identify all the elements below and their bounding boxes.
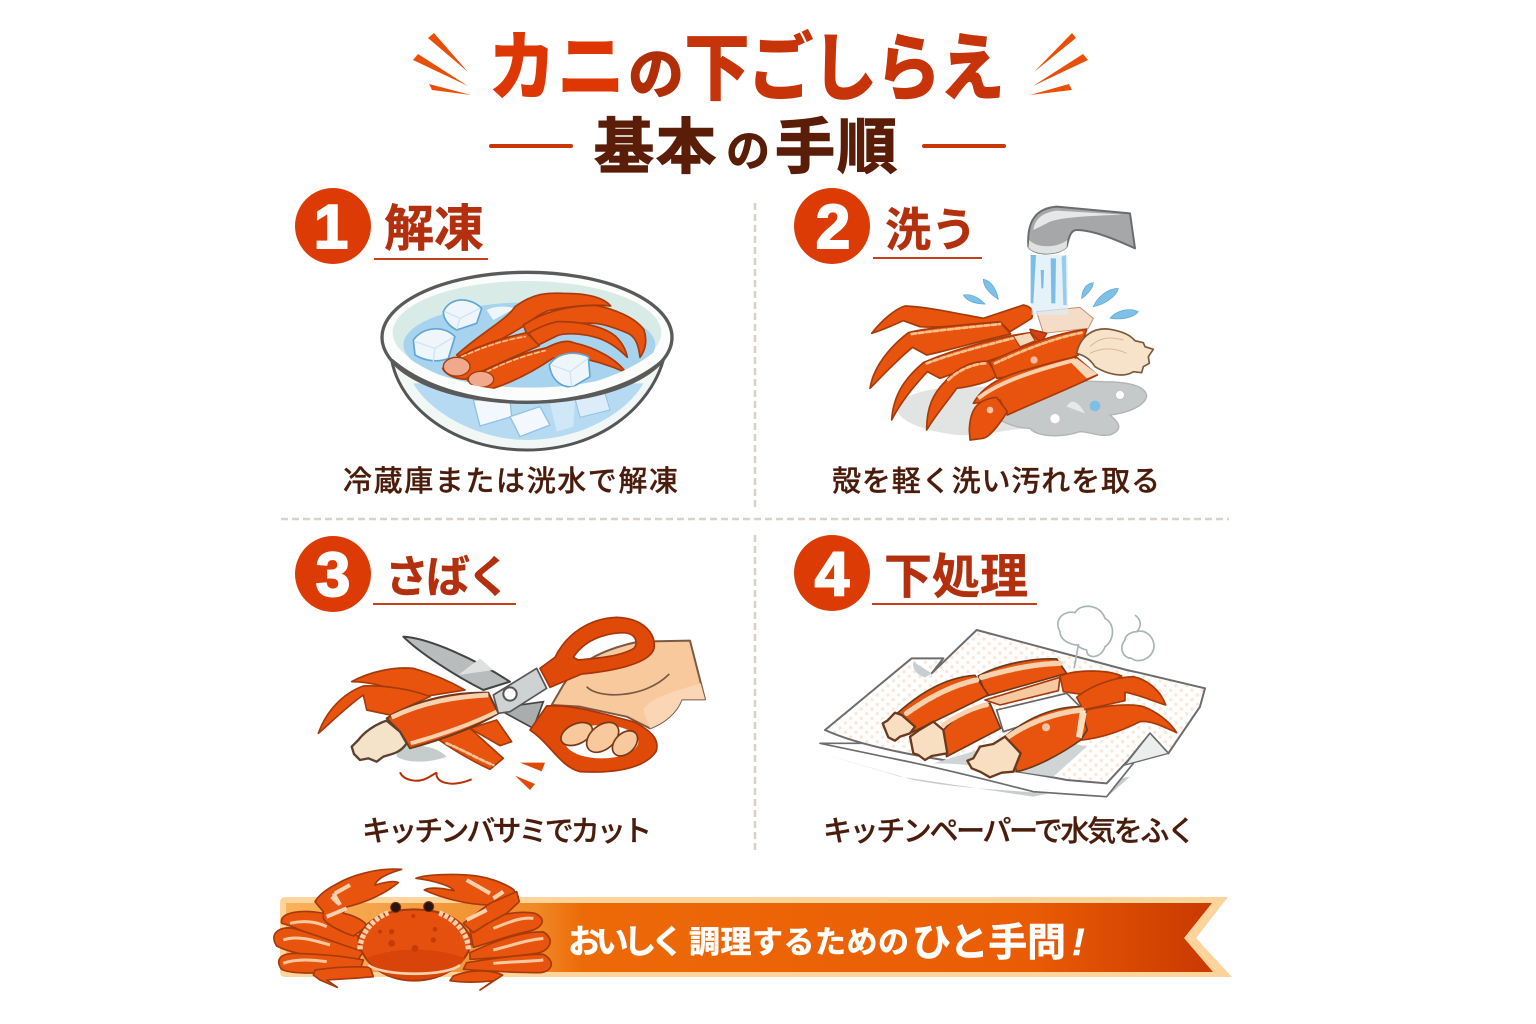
title: main heading: 下ごしらえ bbox=[684, 28, 1005, 110]
banner message: 調理するための bbox=[689, 925, 909, 960]
heading underline 3 bbox=[373, 603, 516, 605]
crab meat end bbox=[1077, 329, 1153, 375]
heading: さばく: さばく bbox=[385, 553, 511, 602]
number badge 1: 1 bbox=[314, 193, 348, 262]
icon: scissors blades bbox=[403, 637, 510, 690]
claws bbox=[315, 869, 519, 936]
heading underline 1 bbox=[374, 258, 488, 260]
dashed vertical and horizontal dividers bbox=[281, 203, 1229, 853]
heading: 洗う: 洗う bbox=[885, 204, 977, 256]
caption step 4: キッチンペーパーで水気をふく bbox=[823, 815, 1196, 848]
subtitle: 手順 bbox=[775, 114, 897, 181]
icon: water splashes bbox=[963, 279, 1138, 319]
number badge 2 bbox=[794, 188, 870, 264]
heading underline 4 bbox=[872, 603, 1037, 605]
subtitle left rule bbox=[489, 144, 573, 148]
illustration: crab legs on kitchen paper bbox=[820, 606, 1205, 797]
banner message bbox=[568, 922, 1085, 965]
title: main heading: の bbox=[628, 43, 684, 106]
heading: 解凍: 解凍 bbox=[384, 201, 484, 257]
heading underline 2 bbox=[873, 257, 982, 259]
icon: right burst lines bbox=[1030, 33, 1088, 95]
icon: hand bbox=[552, 641, 705, 728]
icon: cut marks bbox=[400, 763, 545, 790]
icon: running water bbox=[1031, 255, 1068, 315]
icon: puddle of dirty water bbox=[897, 381, 1147, 436]
crab eyes bbox=[391, 902, 434, 912]
caption step 2: 殻を軽く洗い汚れを取る bbox=[832, 465, 1160, 498]
icon: steam clouds bbox=[1058, 606, 1154, 668]
title: main heading bbox=[488, 26, 1005, 111]
number badge 3: 3 bbox=[316, 541, 350, 610]
back crab meat under water bbox=[1037, 307, 1093, 333]
number badge 1 bbox=[295, 188, 371, 264]
caption step 3: キッチンバサミでカット bbox=[362, 816, 652, 848]
title: main heading: カニ bbox=[488, 26, 625, 111]
illustration: crab legs in a bowl of ice water bbox=[382, 272, 672, 450]
panel: step 4 prep bbox=[794, 535, 1205, 848]
illustration: whole crab bbox=[274, 869, 551, 990]
banner message: おいしく bbox=[568, 923, 684, 960]
illustration: scissors cutting crab leg bbox=[318, 617, 705, 790]
subtitle bbox=[594, 114, 897, 181]
illustration: washing a crab leg under a faucet bbox=[870, 207, 1153, 440]
banner message: ひと手問 bbox=[912, 922, 1066, 965]
crab legs bbox=[978, 659, 1067, 696]
number badge 3 bbox=[295, 536, 371, 612]
icon: left burst lines bbox=[413, 33, 471, 95]
panel: step 1 thaw bbox=[295, 188, 678, 498]
heading: 下処理: 下処理 bbox=[884, 551, 1028, 604]
number badge 4: 4 bbox=[815, 540, 850, 609]
kitchen paper bbox=[820, 743, 1133, 797]
left and right legs bbox=[274, 912, 551, 990]
subtitle right rule bbox=[922, 144, 1006, 148]
panel: step 3 cut bbox=[295, 536, 705, 848]
number badge 2: 2 bbox=[816, 193, 850, 262]
icon: scissors handles bbox=[540, 617, 654, 687]
number badge 4 bbox=[794, 535, 870, 611]
crab body bbox=[358, 909, 472, 981]
banner message: ! bbox=[1072, 922, 1085, 964]
subtitle: の bbox=[726, 127, 770, 176]
panel: step 2 wash bbox=[794, 188, 1160, 498]
icon: faucet bbox=[1028, 207, 1135, 254]
caption step 1: 冷蔵庫または洸水で解凍 bbox=[343, 465, 678, 498]
banner ribbon bbox=[280, 897, 1232, 977]
subtitle: 基本 bbox=[594, 114, 716, 181]
